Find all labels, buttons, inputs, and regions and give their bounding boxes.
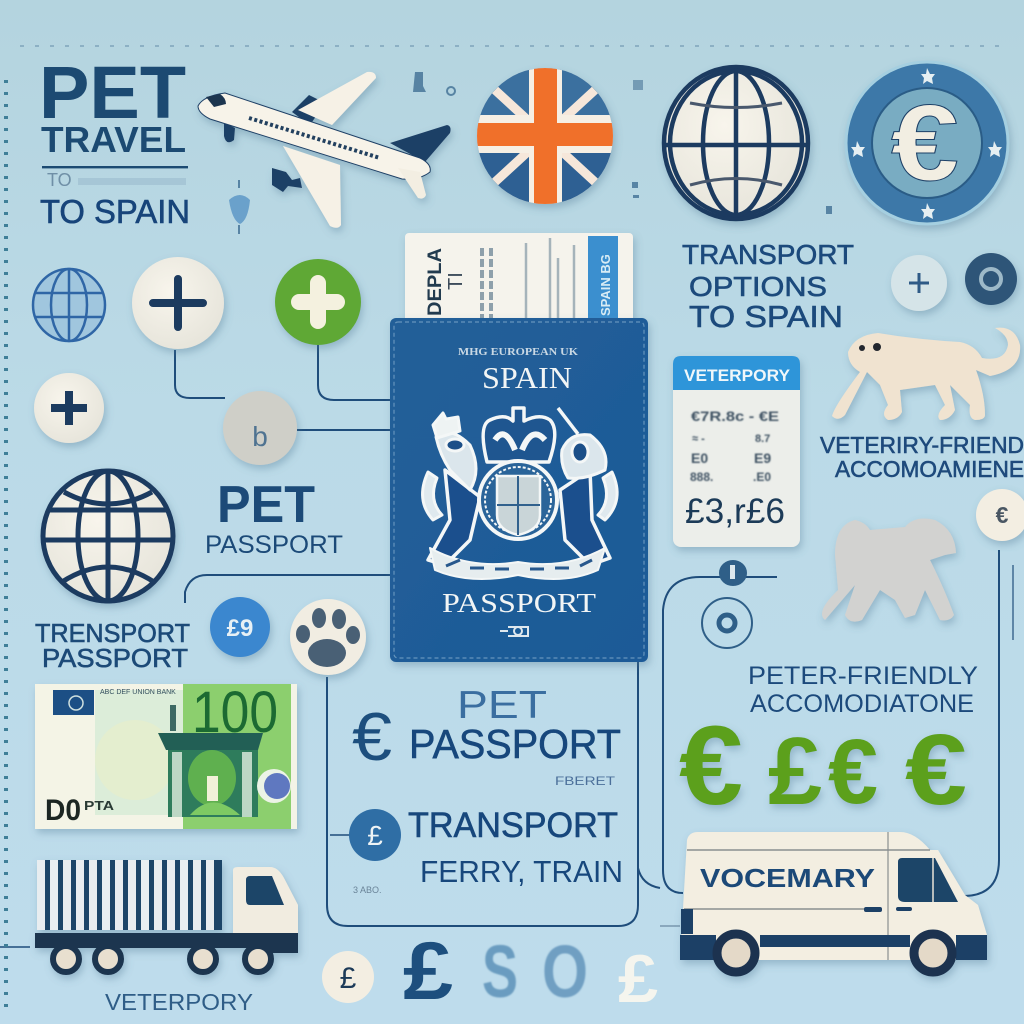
veterinary price card: £3,r£6 xyxy=(685,492,785,531)
label: peter-friendly accommodation: ACCOMODIATONE xyxy=(750,690,974,718)
passport text: Spain: SPAIN xyxy=(482,360,572,395)
label: pet passport: PET xyxy=(217,476,315,534)
icon: euro coin xyxy=(846,62,1008,224)
bottom currency symbols: O xyxy=(542,930,588,1013)
title: TRAVEL xyxy=(41,119,186,160)
title: PET xyxy=(39,51,186,134)
title: TO SPAIN xyxy=(40,193,190,230)
icon: small blue globe xyxy=(33,269,105,341)
bottom currency symbols: S xyxy=(482,930,518,1013)
panel text: pet passport and transport: £ xyxy=(367,820,383,851)
passport text: passport: PASSPORT xyxy=(442,588,597,618)
icon: small plus button xyxy=(34,373,104,443)
ticket: TI xyxy=(445,272,467,290)
icon: grey button xyxy=(223,391,297,465)
title xyxy=(39,51,190,230)
small decorative marks xyxy=(229,72,832,234)
panel text: pet passport and transport: € xyxy=(352,699,392,775)
label: peter-friendly accommodation: PETER-FRIENDLY xyxy=(748,662,978,690)
label: pet passport xyxy=(205,476,343,559)
label: pet passport: PASSPORT xyxy=(205,531,343,559)
label: veterinary-friendly accommodation xyxy=(820,432,1024,482)
icon: veterinary van: VOCEMARY xyxy=(700,863,875,893)
label: veterinary-friendly accommodation: VETERIRY-FRIEND xyxy=(820,432,1024,458)
veterinary price card: ≈ - xyxy=(692,433,705,445)
ticket xyxy=(405,233,633,323)
icon: grey button: b xyxy=(252,421,268,452)
passport text: header: MHG EUROPEAN UK xyxy=(458,346,578,358)
icon: ring target xyxy=(702,561,752,648)
icon: blue euro button xyxy=(210,597,270,657)
veterinary price card: VETERPORY xyxy=(684,366,791,385)
panel text: pet passport and transport: FERRY, TRAIN xyxy=(420,854,623,889)
icon: euro button right xyxy=(976,489,1024,541)
icon: euro button right: € xyxy=(996,502,1009,528)
icon: globe left xyxy=(43,471,173,601)
icon: euro coin: € xyxy=(891,82,959,203)
icon: blue euro button: £9 xyxy=(227,615,253,642)
green euro symbols: € xyxy=(905,714,967,826)
panel text: pet passport and transport: PET xyxy=(457,684,547,727)
label: transport passport: PASSPORT xyxy=(42,643,188,673)
veterinary price card: E0 xyxy=(691,450,708,466)
connector lines xyxy=(0,345,1013,947)
panel text: pet passport and transport: 3 ABO. xyxy=(353,885,382,895)
label: peter-friendly accommodation xyxy=(748,662,978,718)
green euro symbols: € xyxy=(679,703,743,828)
label: veterinary-friendly accommodation: ACCOMOAMIENE xyxy=(835,456,1024,482)
veterinary price card: E9 xyxy=(754,450,771,466)
coat of arms xyxy=(423,408,617,579)
icon: cream plus button xyxy=(132,257,224,349)
passport xyxy=(390,318,648,662)
icon: green plus button xyxy=(275,259,361,345)
euro banknote xyxy=(35,680,297,829)
euro banknote: 100 xyxy=(192,680,278,745)
veterinary price card: .E0 xyxy=(753,470,771,484)
bottom currency symbols xyxy=(322,926,658,1017)
passport chip icon xyxy=(500,627,528,636)
panel text: pet passport and transport: TRANSPORT xyxy=(408,806,618,845)
green euro symbols: € xyxy=(828,721,878,823)
green euro symbols: £ xyxy=(768,718,822,825)
veterinary price card: 8.7 xyxy=(755,433,770,445)
heading: transport options: TO SPAIN xyxy=(689,299,843,334)
icon: cream dog xyxy=(832,328,1020,420)
ticket: DEPLA xyxy=(425,248,446,316)
icon: grey dog xyxy=(822,519,956,622)
label: transport passport: TRENSPORT xyxy=(35,618,190,648)
euro banknote: ABC DEF UNION BANK xyxy=(100,689,176,696)
label: veterinary bottom: VETERPORY xyxy=(105,989,253,1015)
bottom currency symbols: £ xyxy=(403,926,453,1017)
heading: transport options xyxy=(682,239,854,334)
title: TO xyxy=(47,170,72,190)
panel text: pet passport and transport: PASSPORT xyxy=(409,721,621,767)
bottom currency symbols: £ xyxy=(340,962,357,995)
veterinary price card xyxy=(673,356,800,547)
green euro symbols xyxy=(679,703,967,828)
veterinary price card: €7R.8c - €E xyxy=(691,408,779,424)
icon: paw button xyxy=(290,599,366,675)
veterinary price card: 888. xyxy=(690,470,713,484)
heading: transport options: TRANSPORT xyxy=(682,239,854,270)
heading: transport options: OPTIONS xyxy=(689,271,827,302)
label: transport passport xyxy=(35,618,190,673)
bottom currency symbols: £ xyxy=(618,941,658,1017)
panel text: pet passport and transport: FBERET xyxy=(555,774,616,788)
ticket: SPAIN BG xyxy=(598,254,613,316)
icon: large globe xyxy=(664,67,808,219)
icon: union flag xyxy=(475,66,615,206)
icon: airplane xyxy=(198,72,451,228)
euro banknote: PTA xyxy=(84,798,115,813)
euro banknote: D0 xyxy=(45,794,81,827)
icon: truck xyxy=(35,860,298,972)
panel text: pet passport and transport xyxy=(349,684,623,895)
small plus and ring icons xyxy=(891,253,1017,311)
icon: veterinary van xyxy=(680,832,987,972)
